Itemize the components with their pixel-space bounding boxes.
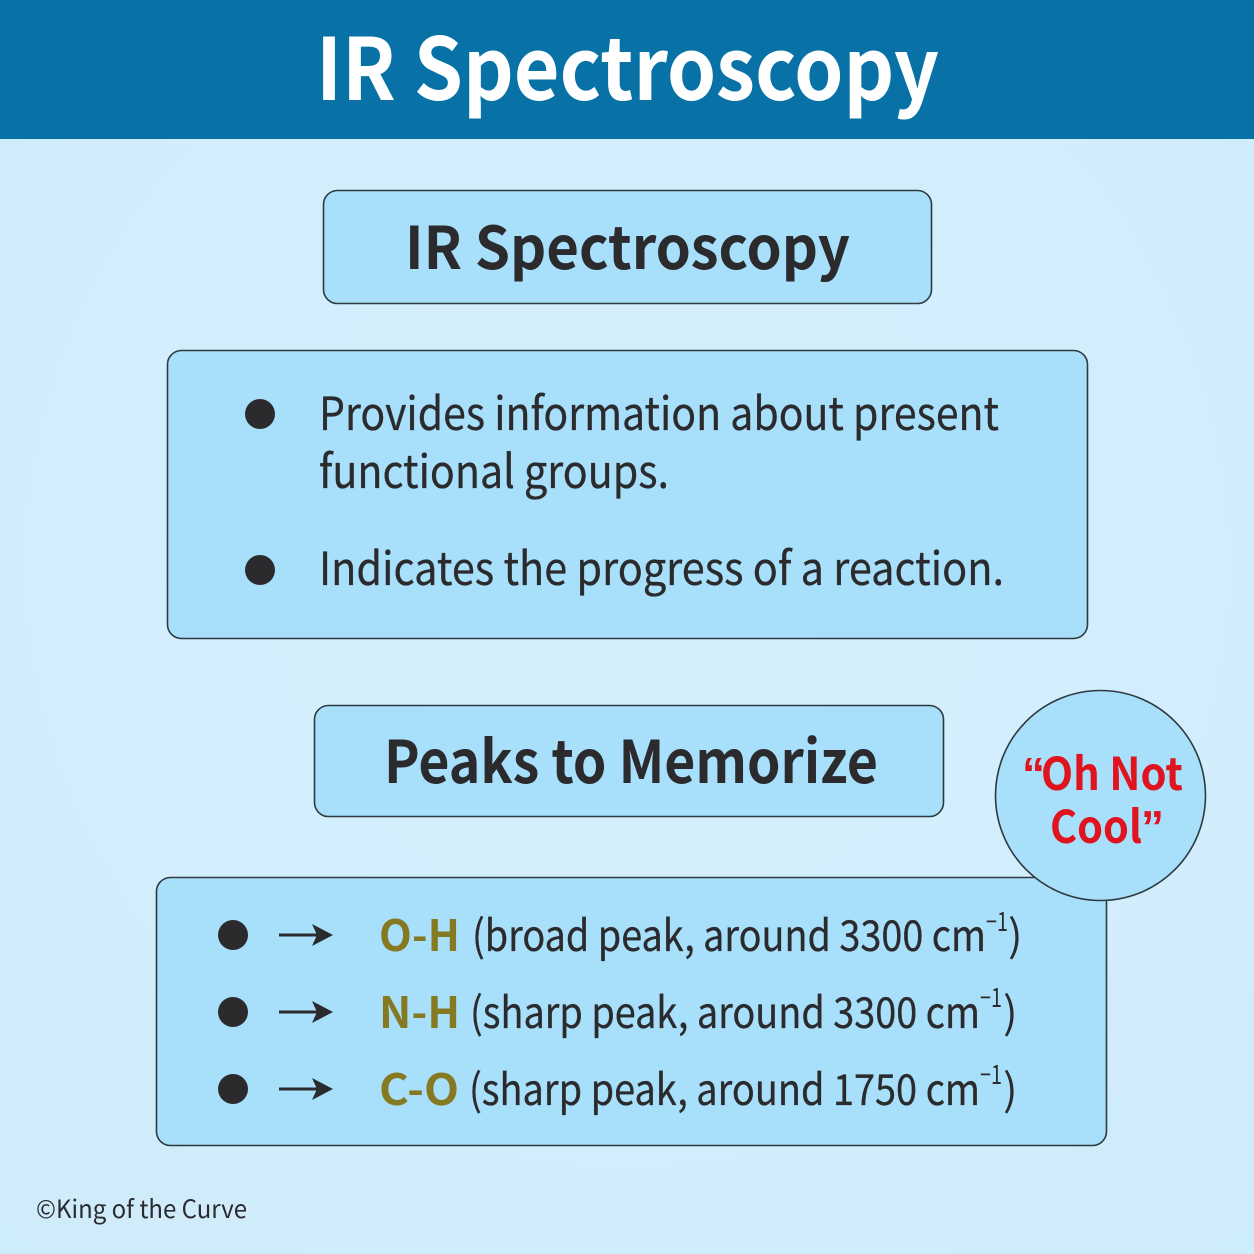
peak row: O-H: ) — [1008, 902, 1023, 964]
heading: IR Spectroscopy: IR Spectroscopy — [405, 201, 850, 286]
title banner — [0, 0, 1254, 139]
heading: Peaks to Memorize: Peaks to Memorize — [384, 715, 878, 800]
peak row: O-H — [218, 902, 1023, 964]
callout: Oh Not Cool mnemonic: ” — [1141, 801, 1164, 853]
peak row: O-H: O-H — [379, 902, 460, 964]
peak row: N-H — [218, 978, 1018, 1041]
peak row: O-H: (broad peak, around 3300 cm — [472, 902, 986, 964]
peak row: C-O: −1 — [980, 1055, 1002, 1092]
bullet 2: Indicates the progress of a reaction. — [319, 533, 1004, 599]
bullet 1 — [245, 378, 999, 502]
bullet 1: Provides information about present — [319, 378, 999, 444]
peak row: N-H: (sharp peak, around 3300 cm — [470, 979, 980, 1041]
peak row: N-H: ) — [1003, 979, 1018, 1041]
copyright footer: ©King of the Curve — [36, 1190, 247, 1226]
callout: Oh Not Cool mnemonic: Cool — [1050, 791, 1142, 856]
bullet 1: functional groups. — [319, 436, 669, 502]
peak row: C-O: C-O — [379, 1056, 459, 1118]
heading: Peaks to Memorize — [314, 706, 944, 816]
callout: Oh Not Cool mnemonic: Oh Not — [1041, 738, 1183, 803]
callout: Oh Not Cool mnemonic: “ — [1022, 748, 1045, 800]
heading: IR Spectroscopy — [324, 190, 932, 304]
panel: overview bullets — [168, 350, 1088, 638]
peak row: C-O — [218, 1055, 1018, 1118]
peak row: N-H: N-H — [379, 979, 460, 1041]
panel: peaks list — [156, 878, 1106, 1146]
peak row: C-O: (sharp peak, around 1750 cm — [469, 1056, 980, 1118]
callout: Oh Not Cool mnemonic — [996, 690, 1206, 900]
peak row: C-O: ) — [1003, 1056, 1018, 1118]
title banner: IR Spectroscopy — [316, 0, 939, 125]
peak row: O-H: −1 — [986, 902, 1008, 939]
peak row: N-H: −1 — [980, 978, 1002, 1015]
